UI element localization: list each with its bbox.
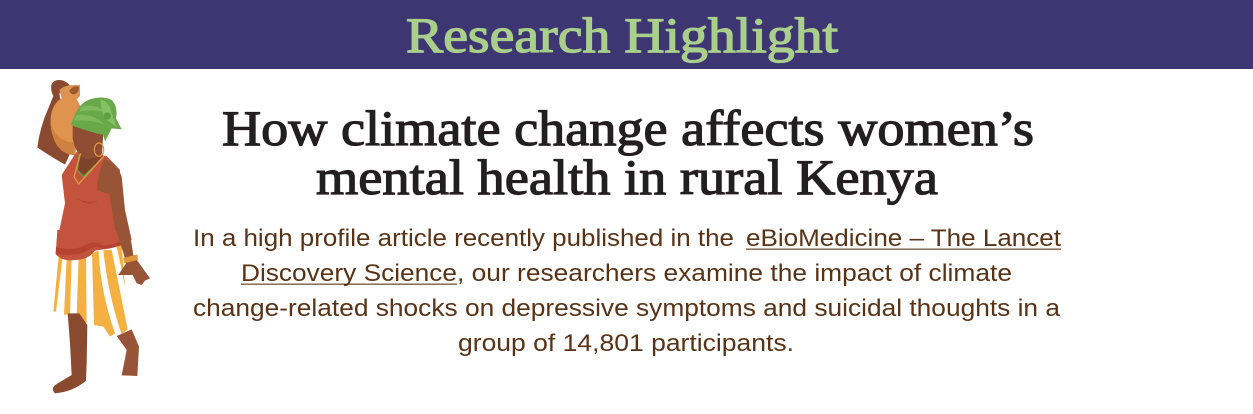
article summary [193,225,1061,357]
lower body and skirt [53,230,150,393]
article summary: eBioMedicine – The Lancet [746,225,1061,252]
article summary: In a high profile article recently published in the [193,225,734,252]
article headline: mental health in rural Kenya [316,149,938,205]
article headline [222,100,1034,205]
article summary: change-related shocks on depressive symptoms and suicidal thoughts in a [193,295,1060,322]
illustration: woman carrying a water jar [37,80,150,393]
article summary: group of 14,801 participants. [458,330,794,357]
article headline: How climate change affects women’s [222,100,1034,156]
banner title: Research Highlight [406,7,838,63]
article summary: , our researchers examine the impact of climate [457,260,1012,287]
header banner [0,0,1253,69]
upper body and jar [37,80,132,240]
article summary: Discovery Science [241,260,457,287]
